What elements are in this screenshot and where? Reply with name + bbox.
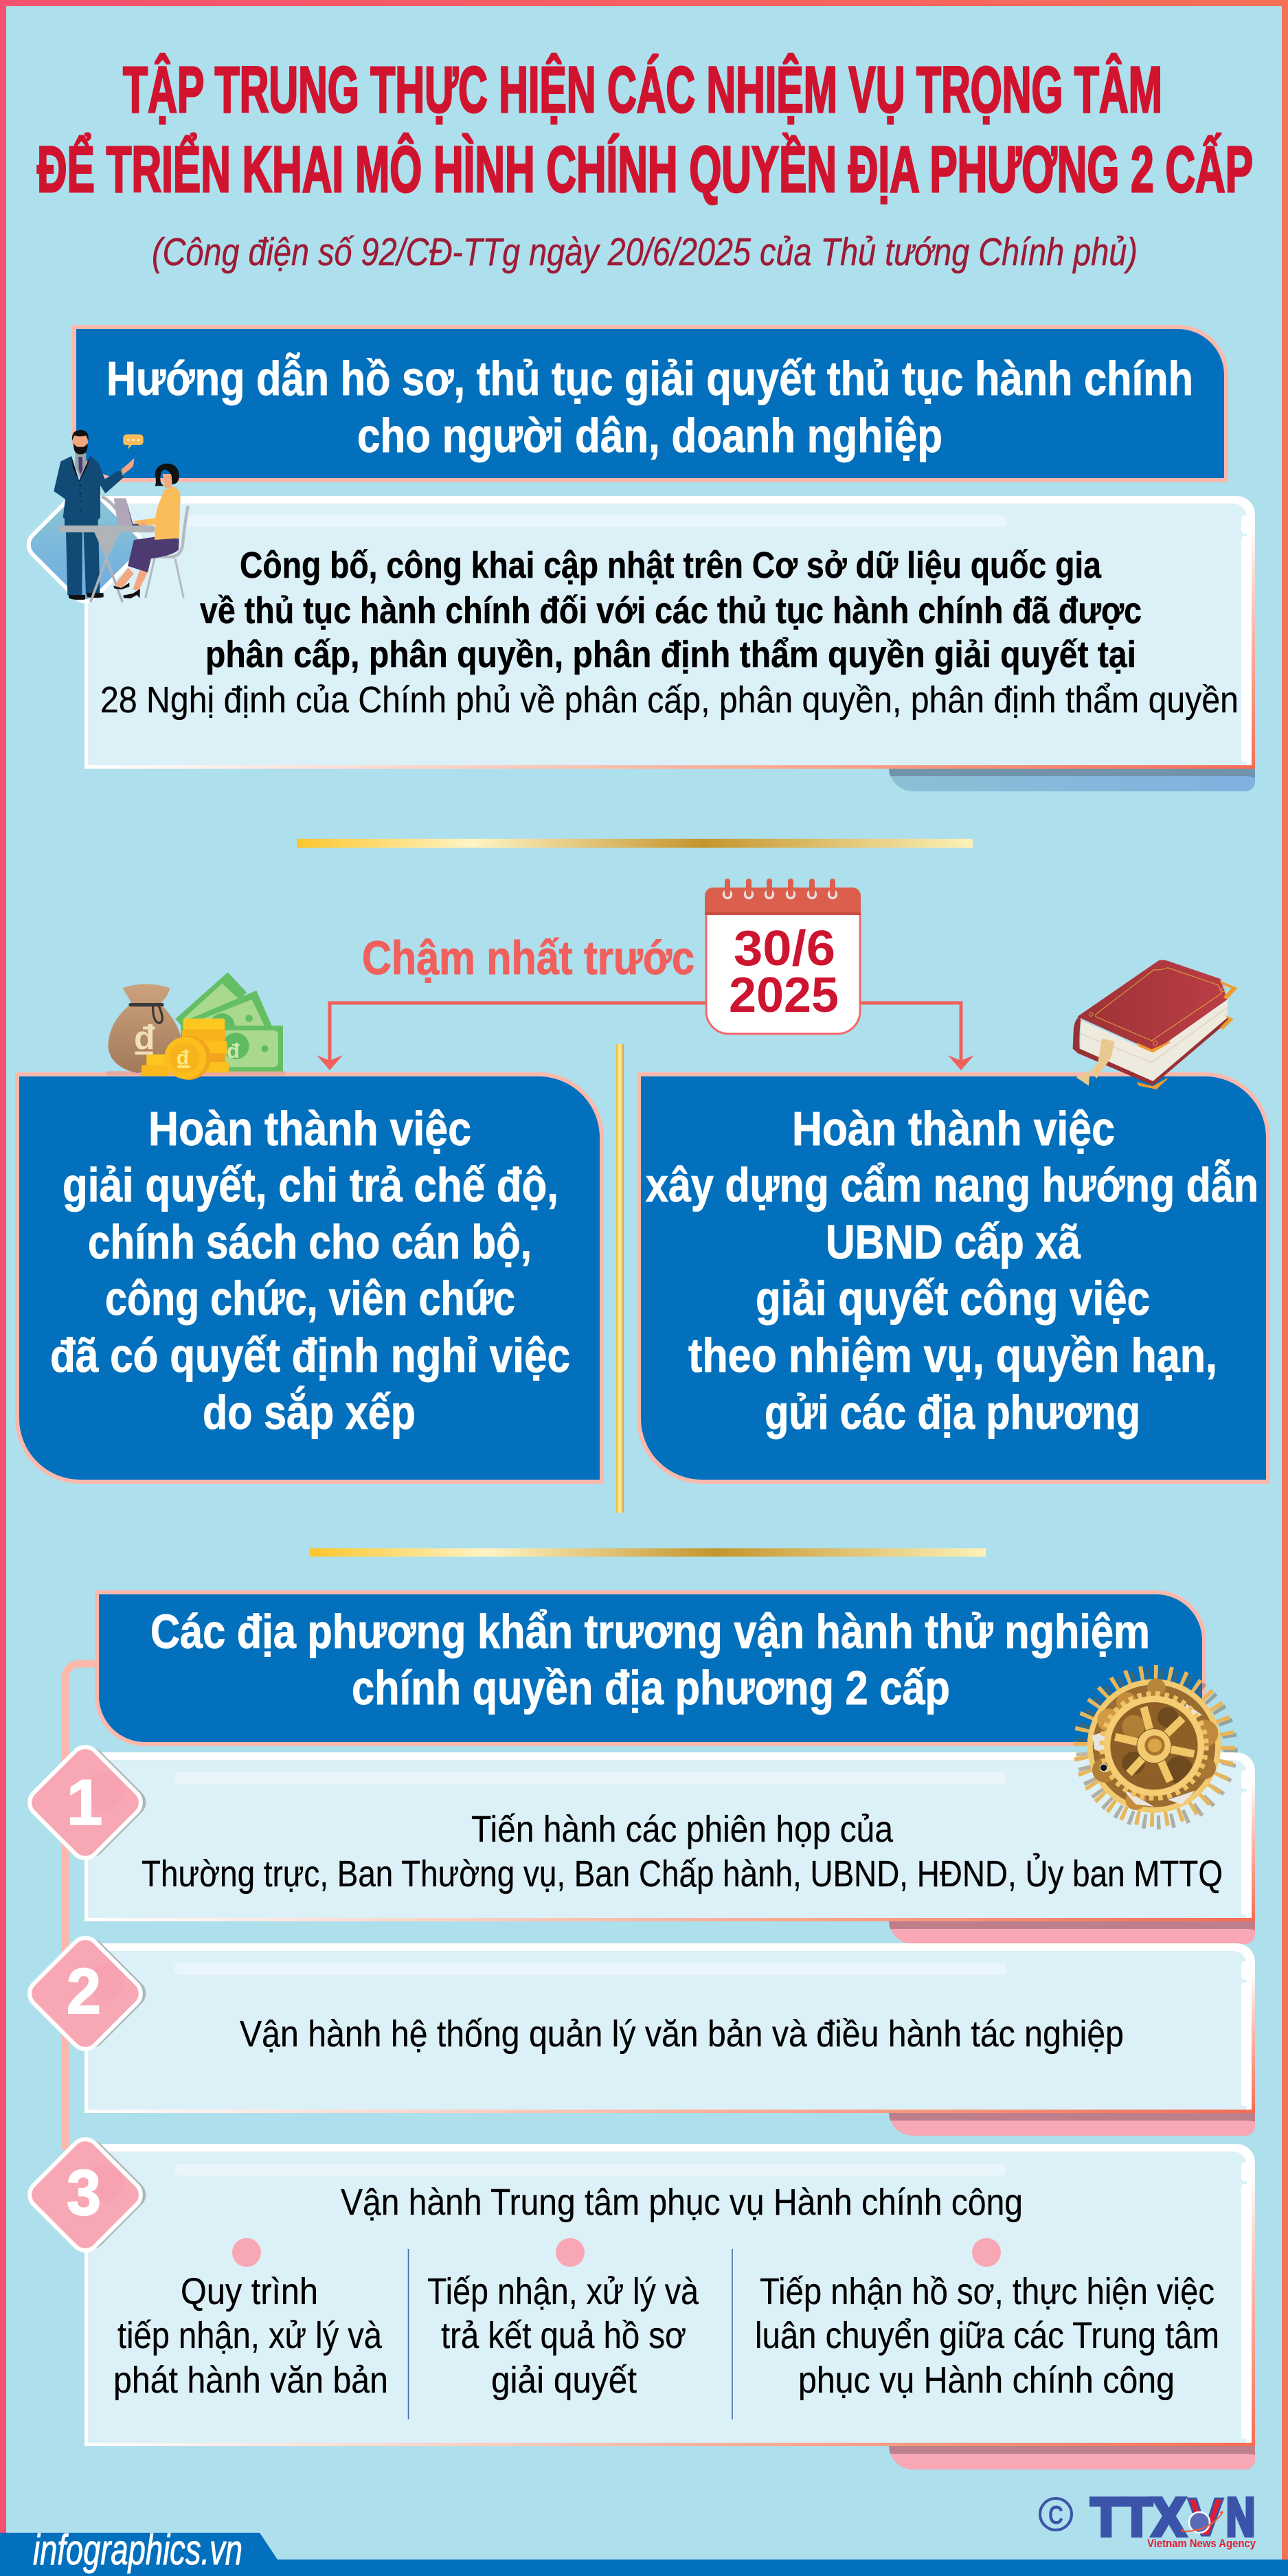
gold divider	[310, 1548, 986, 1557]
sub-column: transfer: Tiếp nhận hồ sơ, thực hiện việc	[760, 2271, 1214, 2312]
card text: Công bố, công khai cập nhật trên Cơ sở dữ liệu quốc gia	[240, 545, 1102, 586]
logo: copyright and TTXVN: TTX	[1091, 2487, 1186, 2547]
logo: copyright and TTXVN: C	[1048, 2501, 1063, 2530]
logo: copyright and TTXVN: Vietnam News Agency	[1147, 2537, 1256, 2550]
content card	[84, 496, 1255, 791]
badge 2: 2	[67, 1955, 101, 2027]
vertical gold separator	[616, 1044, 624, 1513]
gold divider	[297, 839, 973, 848]
badge 2	[24, 1932, 152, 2055]
icon: man and woman at a desk	[54, 430, 188, 602]
panel: right task: gửi các địa phương	[765, 1386, 1140, 1439]
panel: pilot operation	[24, 1592, 1255, 2470]
panel: left task: đã có quyết định nghỉ việc	[50, 1329, 570, 1382]
footer band	[0, 2533, 1288, 2576]
badge 3	[24, 2134, 152, 2256]
sub-column: process: tiếp nhận, xử lý và	[117, 2315, 383, 2356]
sub-column: reception	[427, 2238, 699, 2401]
icon: red handbook	[1073, 960, 1238, 1089]
section header banner: chính quyền địa phương 2 cấp	[352, 1661, 950, 1715]
step 3 card: Vận hành Trung tâm phục vụ Hành chính công	[341, 2182, 1023, 2223]
panel: right task: giải quyết công việc	[756, 1272, 1150, 1325]
panel: right task: UBND cấp xã	[826, 1215, 1081, 1269]
section header banner	[97, 1592, 1204, 1744]
icon: money bag, banknotes and coins: đ	[134, 1018, 155, 1057]
timeline bracket	[65, 1664, 95, 2150]
section header banner: cho người dân, doanh nghiệp	[357, 409, 942, 462]
panel: right task: theo nhiệm vụ, quyền hạn,	[688, 1329, 1217, 1382]
panel: left task: chính sách cho cán bộ,	[88, 1215, 532, 1269]
sub-column: transfer: luân chuyển giữa các Trung tâm	[755, 2315, 1219, 2356]
icon: money bag, banknotes and coins: đ	[177, 1046, 190, 1069]
deadline label: Chậm nhất trước	[362, 931, 694, 984]
logo: copyright and TTXVN: V	[1188, 2487, 1223, 2547]
step 2 card	[84, 1943, 1255, 2136]
card text: phân cấp, phân quyền, phân định thẩm quyền giải quyết tại	[205, 634, 1136, 675]
panel: left task: Hoàn thành việc	[148, 1102, 471, 1155]
arrow: deadline to right panel	[859, 1003, 974, 1070]
title	[37, 53, 1253, 206]
diamond behind illustration	[23, 482, 148, 607]
panel: right task	[639, 1074, 1268, 1482]
sub-column: transfer: phục vụ Hành chính công	[798, 2360, 1175, 2401]
panel: left task: công chức, viên chức	[105, 1272, 515, 1325]
step 3 card	[84, 2144, 1255, 2470]
panel: left task	[17, 1074, 602, 1482]
card text: về thủ tục hành chính đối với các thủ tục hành chính đã được	[200, 590, 1142, 631]
step 1 card	[84, 1752, 1255, 1944]
footer site name: infographics.vn	[33, 2527, 242, 2574]
sub-column: process: phát hành văn bản	[113, 2360, 388, 2401]
badge 1: 1	[67, 1766, 102, 1838]
sub-column: reception: Tiếp nhận, xử lý và	[427, 2271, 699, 2312]
panel: left task: giải quyết, chi trả chế độ,	[63, 1158, 558, 1212]
badge 1	[24, 1741, 152, 1864]
icon: calendar deadline: 30/6	[734, 921, 835, 976]
sub-column: transfer	[755, 2238, 1219, 2401]
sub-column: reception: trả kết quả hồ sơ	[441, 2315, 686, 2356]
panel: left task: do sắp xếp	[203, 1386, 416, 1439]
panel: right task: Hoàn thành việc	[792, 1102, 1115, 1155]
logo: copyright and TTXVN: N	[1226, 2487, 1255, 2547]
step 1 card: Tiến hành các phiên họp của	[471, 1809, 894, 1850]
logo: copyright and TTXVN	[1040, 2487, 1256, 2550]
icon: golden gear	[1081, 1672, 1230, 1822]
card text	[100, 545, 1239, 721]
sub-column: process	[113, 2238, 388, 2401]
panel: administrative procedures	[23, 327, 1255, 791]
icon: calendar deadline: 2025	[729, 968, 839, 1023]
icon: calendar deadline	[705, 879, 861, 1034]
icon: money bag, banknotes and coins: đ	[227, 1039, 240, 1063]
sub-column: reception: giải quyết	[491, 2360, 637, 2401]
icon: money bag, banknotes and coins	[106, 972, 286, 1080]
step 2 card: Vận hành hệ thống quản lý văn bản và điều hành tác nghiệp	[240, 2013, 1124, 2055]
badge 3: 3	[67, 2156, 101, 2228]
arrow: deadline to left panel	[317, 1003, 708, 1070]
sub-column: process: Quy trình	[181, 2271, 318, 2312]
section header banner	[74, 327, 1226, 480]
